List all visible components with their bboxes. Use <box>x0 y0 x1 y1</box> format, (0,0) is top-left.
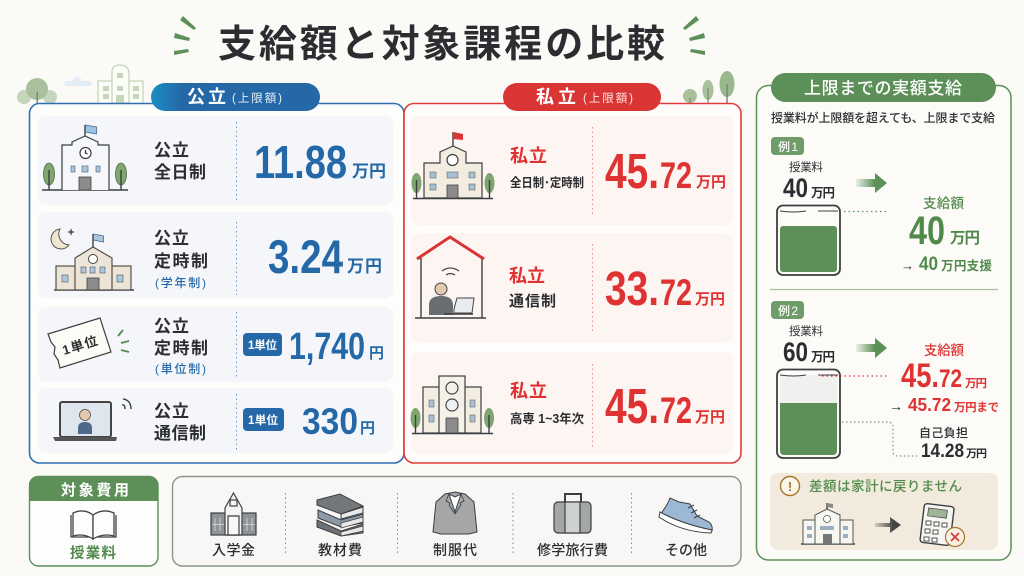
panel: actual payment up to the cap <box>756 73 1011 560</box>
decorative separator <box>770 288 998 290</box>
amount: 円 <box>369 345 384 362</box>
row: public part-time (grade) <box>38 212 393 298</box>
result <box>901 195 992 275</box>
amount: 万円 <box>695 291 725 308</box>
decorative dotted divider <box>630 493 632 554</box>
tuition: 万円 <box>811 350 835 364</box>
amount: 72 <box>660 155 692 196</box>
heading: 対象費用 <box>61 481 129 499</box>
icon: school <box>801 503 855 544</box>
panel: private schools <box>404 83 741 463</box>
label: 公立 <box>154 402 189 421</box>
row: private technical college <box>410 352 733 454</box>
icon: school building <box>211 493 256 535</box>
row: public full-time <box>38 116 393 205</box>
tuition: 万円 <box>811 186 835 200</box>
dotted cap line <box>822 375 888 377</box>
amount: 万円 <box>696 174 726 191</box>
label <box>154 402 206 443</box>
icon: technical college building <box>410 376 494 434</box>
arrow <box>875 517 901 533</box>
icon: school with red flag <box>412 132 494 198</box>
item: uniform <box>433 492 477 558</box>
self-pay: 自己負担 <box>919 426 968 440</box>
label: 通信制 <box>154 424 206 443</box>
row: private technical college: 高専 1~3年次 <box>510 411 584 426</box>
item: textbooks <box>317 494 363 558</box>
label: 定時制 <box>154 252 208 271</box>
text: 差額は家計に戻りません <box>809 478 962 494</box>
heading pill: 上限までの実額支給 <box>804 79 962 98</box>
badge: 1単位 <box>248 413 278 427</box>
icon: calculator with cross <box>920 503 964 546</box>
label: 私立 <box>509 266 545 286</box>
icon: warning <box>780 476 800 496</box>
heading pill: public: (上限額) <box>232 91 282 105</box>
heading pill: private: 私立 <box>536 87 576 107</box>
result <box>889 342 999 415</box>
result: 40 <box>909 209 945 253</box>
icon: warning: ! <box>788 479 792 494</box>
heading pill: private <box>503 83 661 111</box>
icon: one-credit ticket: 1単位 <box>60 333 99 358</box>
item: school trip <box>537 494 608 558</box>
icon: blazer <box>433 492 477 534</box>
badge <box>771 137 804 155</box>
result: 万円支援 <box>941 258 992 273</box>
label: その他 <box>665 542 707 558</box>
divider <box>236 312 238 378</box>
icon: sneaker <box>659 498 712 533</box>
self-pay: 14.28 <box>921 441 964 462</box>
badge: 1単位 <box>248 338 278 352</box>
scenery: trees, top right <box>683 71 734 104</box>
label: 公立 <box>154 229 189 248</box>
amount: 1,740 <box>289 326 365 368</box>
tuition: 40 <box>783 173 808 203</box>
amount <box>605 145 726 199</box>
divider <box>236 122 238 200</box>
divider <box>236 222 238 295</box>
row: public part-time (grade): (学年制) <box>155 275 206 290</box>
row: private full-time: 全日制･定時制 <box>510 175 584 190</box>
result: 45.72 <box>908 395 951 415</box>
icon: suitcase <box>554 494 591 533</box>
amount: 万円 <box>695 409 725 426</box>
decorative dotted divider <box>284 493 286 554</box>
icon: home study with wifi <box>415 237 486 318</box>
icon: night school <box>51 228 134 290</box>
result: 万円 <box>950 230 980 247</box>
label: 制服代 <box>433 542 477 558</box>
heading pill: private: (上限額) <box>583 91 633 105</box>
badge: 例1 <box>778 140 798 154</box>
amount: 円 <box>360 420 375 437</box>
row: private correspondence <box>411 233 733 343</box>
divider <box>592 364 594 448</box>
panel: public schools <box>30 83 404 463</box>
row: public correspondence <box>38 388 393 453</box>
dotted level line <box>844 210 888 212</box>
label: 修学旅行費 <box>537 542 608 558</box>
subheading: 授業料が上限額を超えても、上限まで支給 <box>771 110 995 125</box>
badge <box>243 333 282 356</box>
label: 私立 <box>510 146 547 166</box>
divider <box>236 394 238 450</box>
amount: 72 <box>660 390 692 431</box>
panel: covered cost <box>29 476 158 566</box>
heading pill: public: 公立 <box>187 87 226 107</box>
panel: other costs <box>172 476 741 566</box>
result: → <box>901 258 914 273</box>
example 2 <box>771 301 999 462</box>
label <box>154 229 208 271</box>
tuition <box>783 160 835 203</box>
heading pill: public <box>151 83 320 111</box>
tuition: 60 <box>783 337 808 367</box>
label: 公立 <box>154 141 189 160</box>
label: 全日制 <box>154 163 206 182</box>
result: 支給額 <box>923 195 964 211</box>
label: 私立 <box>510 381 547 401</box>
label <box>154 317 208 358</box>
result: 万円 <box>965 377 987 390</box>
callout: difference not returned <box>770 473 998 550</box>
label: 入学金 <box>212 542 255 558</box>
tuition <box>783 324 835 367</box>
title: 支給額と対象課程の比較 <box>218 24 665 66</box>
result: 万円まで <box>954 401 999 414</box>
example 1 <box>771 137 992 275</box>
badge <box>243 408 284 431</box>
result: 45. <box>901 357 939 395</box>
result: 40 <box>919 254 938 275</box>
result: 72 <box>939 365 962 393</box>
heading pill <box>771 73 996 102</box>
tuition: 授業料 <box>789 160 824 174</box>
amount: 33. <box>605 263 659 316</box>
amount: 330 <box>302 401 358 442</box>
row: private full-time <box>411 116 733 225</box>
divider <box>592 244 594 331</box>
label: 授業料 <box>70 544 116 562</box>
amount: 11.88 <box>254 136 347 188</box>
item: admission fee <box>211 493 256 558</box>
amount <box>605 380 725 434</box>
dotted connector to self-pay <box>842 422 918 456</box>
amount: 万円 <box>352 162 386 181</box>
decorative dotted divider <box>512 493 514 554</box>
badge: 例2 <box>778 304 798 318</box>
arrow <box>856 338 887 358</box>
result: 支給額 <box>924 342 964 358</box>
icon: stacked books <box>317 494 363 536</box>
item: other <box>659 498 712 558</box>
label: 定時制 <box>154 339 208 358</box>
label <box>154 141 206 182</box>
label: 公立 <box>154 317 189 336</box>
result: → <box>889 398 903 414</box>
badge <box>771 301 804 319</box>
label: 教材費 <box>318 542 362 558</box>
beaker <box>777 370 840 458</box>
decorative rays right of title <box>683 16 705 55</box>
decorative rays left of title <box>174 16 196 55</box>
amount: 72 <box>660 272 692 313</box>
beaker <box>777 206 840 275</box>
scenery: trees and school, top left <box>17 65 143 104</box>
decorative dotted divider <box>396 493 398 554</box>
icon: open book <box>71 511 116 539</box>
icon: school with flag <box>42 125 128 190</box>
divider <box>592 127 594 214</box>
self-pay <box>919 426 987 462</box>
amount: 3.24 <box>268 230 343 283</box>
self-pay: 万円 <box>966 447 987 460</box>
row: public part-time (credit): (単位制) <box>155 361 206 376</box>
amount: 45. <box>605 380 659 434</box>
row: public part-time (credit) <box>38 307 393 382</box>
tuition: 授業料 <box>789 324 824 338</box>
amount <box>605 263 725 316</box>
icon: laptop with teacher <box>53 399 131 441</box>
icon: one-credit ticket <box>48 318 129 368</box>
amount: 45. <box>605 145 659 199</box>
amount: 万円 <box>347 257 382 276</box>
row: private correspondence: 通信制 <box>509 293 556 310</box>
arrow <box>856 173 887 193</box>
